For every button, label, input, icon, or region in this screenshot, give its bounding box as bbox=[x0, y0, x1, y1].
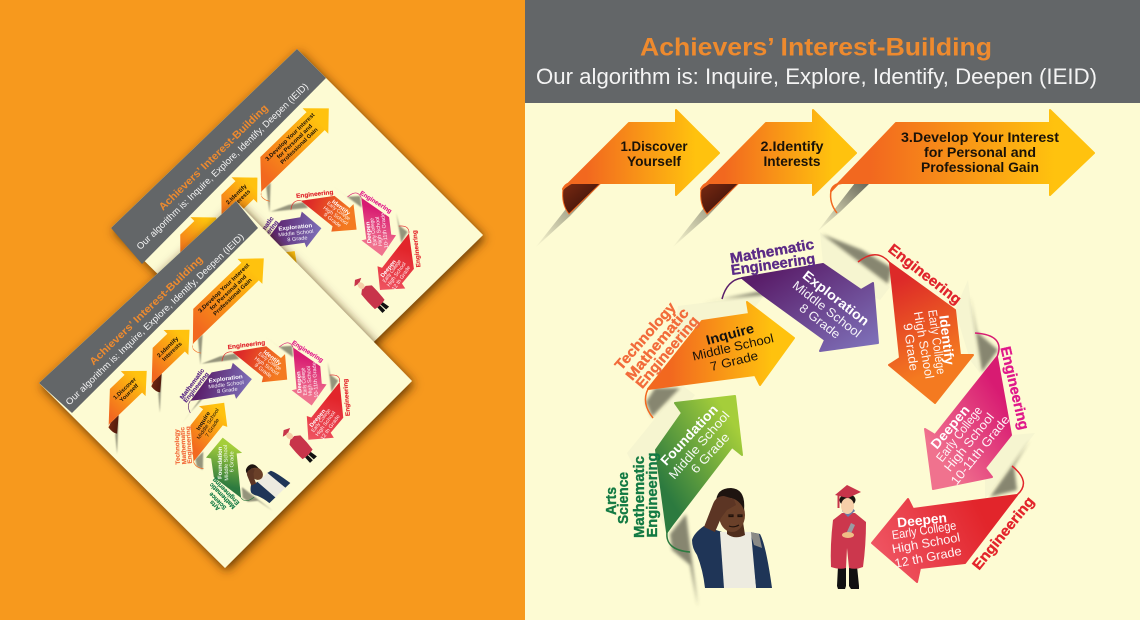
front card artwork: Deepen bbox=[309, 408, 328, 429]
front card artwork: Engineering bbox=[342, 378, 352, 416]
front card artwork: Mathematic bbox=[179, 426, 188, 465]
curl line bbox=[1012, 466, 1023, 495]
gown bbox=[831, 513, 866, 569]
jacket bbox=[692, 526, 772, 588]
front card artwork: 7 Grade bbox=[205, 418, 221, 438]
subject label: Engineering bbox=[885, 241, 964, 308]
collar bbox=[842, 508, 855, 517]
subject label: Engineering bbox=[970, 494, 1038, 573]
school level: Middle School bbox=[790, 278, 864, 340]
fold tail bbox=[817, 183, 870, 232]
front card artwork bbox=[54, 222, 397, 560]
front card artwork: Inquire bbox=[196, 411, 212, 432]
arrow label: 2.Identify bbox=[760, 139, 824, 154]
front card artwork: High School bbox=[315, 410, 337, 438]
back card artwork: Interests bbox=[231, 189, 252, 210]
front card paper bbox=[39, 201, 412, 568]
front card artwork: High School bbox=[306, 366, 314, 396]
curl line bbox=[667, 532, 690, 552]
school level: Middle School bbox=[691, 331, 775, 364]
subjects label: Engineering bbox=[730, 251, 816, 279]
raised arm and hand bbox=[704, 496, 736, 532]
icon: graduate in red gown bbox=[831, 485, 866, 589]
subjects label: Science bbox=[616, 472, 632, 524]
Deepen 10-11 step bbox=[925, 333, 1031, 489]
front thumbnail card bbox=[39, 201, 412, 568]
back card artwork: High School bbox=[386, 261, 408, 288]
face bbox=[719, 498, 745, 532]
red arrow bbox=[872, 495, 1017, 582]
curl line bbox=[645, 389, 653, 418]
grade: 10-11th Grade bbox=[948, 413, 1013, 488]
front card artwork: Exploration bbox=[208, 374, 244, 385]
eyes and mouth bbox=[729, 515, 742, 527]
back card artwork: 9 Grade bbox=[322, 212, 342, 229]
front card artwork: Deepen bbox=[296, 370, 304, 393]
step name: Inquire bbox=[704, 320, 756, 348]
back card artwork: 2.Identify bbox=[225, 183, 249, 206]
diploma bbox=[846, 523, 855, 536]
hair bbox=[840, 494, 856, 506]
grade: 12 th Grade bbox=[893, 544, 963, 571]
subject label: Engineering bbox=[997, 345, 1031, 431]
hands bbox=[842, 532, 854, 538]
front card artwork: High School bbox=[253, 356, 280, 377]
front card artwork: Early College bbox=[257, 351, 282, 372]
arrow label: 3.Develop Your Interest bbox=[901, 130, 1060, 145]
front card artwork: Foundation bbox=[218, 446, 224, 479]
back card artwork: Early College bbox=[325, 201, 351, 222]
front card artwork: Engineering bbox=[227, 339, 266, 351]
dark curl bbox=[563, 183, 601, 214]
front card artwork: Engineering bbox=[290, 339, 325, 364]
back card artwork: Our algorithm is: Inquire, Explore, Identify, Deepen (IEID) bbox=[135, 81, 310, 252]
front card artwork: Mathematic bbox=[179, 367, 207, 401]
front card artwork: Engineering bbox=[185, 426, 194, 464]
green arrow bbox=[656, 396, 742, 532]
step name: Identify bbox=[936, 314, 957, 366]
back card artwork: Deepen bbox=[365, 221, 373, 243]
front card artwork: Mathematic bbox=[208, 481, 237, 510]
arrow 2: Identify Interests bbox=[672, 110, 856, 248]
front card artwork: 12 th Grade bbox=[320, 414, 342, 441]
step name: Deepen bbox=[928, 402, 973, 452]
front card artwork: Engineering bbox=[211, 476, 241, 506]
legs bbox=[837, 566, 859, 589]
arrow label line 2: for Personal and bbox=[924, 145, 1036, 160]
grade: 8 Grade bbox=[797, 301, 843, 342]
back card artwork: Engineering bbox=[296, 189, 334, 200]
back card artwork: Early College bbox=[382, 259, 403, 284]
hood bbox=[750, 532, 762, 548]
header band bbox=[525, 0, 1140, 103]
front card artwork: 2.Identify bbox=[156, 336, 181, 359]
step name: Deepen bbox=[896, 510, 948, 530]
orange arrow bbox=[648, 302, 794, 389]
front card artwork: 10-11th Grade bbox=[311, 362, 320, 398]
front card artwork: Middle School bbox=[196, 408, 221, 441]
school type: Early College bbox=[933, 404, 985, 465]
tassel bbox=[838, 495, 840, 508]
curl line bbox=[975, 333, 999, 357]
curl line bbox=[722, 278, 742, 299]
back card artwork: Deepen bbox=[380, 259, 398, 279]
back card artwork: High School bbox=[322, 205, 349, 227]
back card artwork: Middle School bbox=[278, 229, 314, 238]
back card artwork: Engineering bbox=[411, 230, 422, 268]
arrow body bbox=[563, 110, 719, 195]
arrow 1: Discover Yourself bbox=[535, 110, 719, 248]
mortarboard bbox=[835, 485, 861, 498]
subjects label: Mathematic bbox=[729, 237, 815, 267]
front card artwork: Identify bbox=[262, 350, 283, 368]
arrow label line 3: Professional Gain bbox=[921, 160, 1039, 175]
school level: Middle School bbox=[666, 409, 732, 482]
front card artwork: Our algorithm is: Inquire, Explore, Identify, Deepen (IEID) bbox=[64, 232, 246, 407]
school type: Early College bbox=[925, 309, 948, 375]
back card artwork: 12 th Grade bbox=[391, 265, 412, 292]
school type: Early College bbox=[891, 518, 957, 542]
front card artwork: 8 Grade bbox=[217, 387, 238, 395]
icon: boy with hand on forehead bbox=[692, 488, 772, 588]
back card artwork: Identify bbox=[330, 199, 352, 217]
curl line bbox=[831, 191, 837, 213]
back card artwork: High School bbox=[375, 216, 384, 246]
front card artwork: Middle School bbox=[223, 445, 230, 481]
hair bbox=[716, 488, 744, 510]
arrow label: 1.Discover bbox=[620, 139, 688, 154]
back card artwork: 8 Grade bbox=[287, 235, 308, 243]
subjects label: Mathematic bbox=[632, 456, 648, 538]
back card artwork: Mathematic bbox=[249, 215, 276, 248]
pink arrow bbox=[925, 357, 1011, 489]
back card artwork: Engineering bbox=[358, 190, 393, 215]
front card artwork: 9 Grade bbox=[253, 363, 273, 379]
back card artwork bbox=[125, 72, 460, 401]
fold tail bbox=[535, 183, 601, 248]
back card artwork: for Personal and bbox=[276, 123, 314, 160]
back thumbnail card bbox=[111, 49, 483, 414]
grade: 9 Grade bbox=[900, 322, 921, 372]
back card artwork: Early College bbox=[369, 218, 379, 246]
front card artwork: Yourself bbox=[119, 383, 140, 404]
front card artwork: 6 Grade bbox=[229, 451, 235, 472]
grade: 7 Grade bbox=[709, 349, 760, 374]
subjects label bbox=[729, 237, 816, 279]
arrow label line 2: Yourself bbox=[627, 154, 682, 169]
fold tail bbox=[672, 183, 739, 248]
subjects label: Engineering bbox=[645, 452, 661, 538]
dark curl bbox=[701, 183, 739, 214]
subjects label bbox=[612, 300, 703, 392]
title: Achievers’ Interest-Building bbox=[640, 34, 992, 62]
main infographic panel bbox=[525, 0, 1140, 620]
front card artwork: Science bbox=[207, 490, 228, 511]
subjects label: Engineering bbox=[633, 313, 703, 392]
back card header band bbox=[111, 49, 326, 264]
arrow body bbox=[701, 110, 856, 195]
subjects label: Mathematic bbox=[623, 305, 693, 384]
step name: Exploration bbox=[800, 268, 872, 329]
purple arrow bbox=[742, 264, 878, 351]
front card artwork: Interests bbox=[162, 341, 184, 363]
neck bbox=[727, 522, 745, 537]
fold shadows behind the spiral bbox=[627, 232, 1035, 607]
Foundation step bbox=[604, 396, 742, 552]
subjects label bbox=[604, 452, 661, 538]
front card artwork: Arts bbox=[208, 498, 222, 512]
front card artwork: Engineering bbox=[182, 371, 211, 404]
subjects label: Arts bbox=[604, 487, 620, 515]
front card header band bbox=[39, 201, 258, 413]
school level: High School bbox=[942, 410, 997, 474]
arrow 3: Develop Your Interest bbox=[817, 110, 1094, 232]
Exploration step bbox=[722, 237, 878, 351]
arrow label line 2: Interests bbox=[764, 154, 820, 169]
front card artwork: 3.Develop Your Interest bbox=[198, 263, 251, 314]
subjects label: Technology bbox=[612, 300, 679, 374]
front card artwork: Middle School bbox=[208, 380, 244, 390]
school level: High School bbox=[911, 310, 936, 380]
front card artwork: Early College bbox=[311, 408, 332, 434]
arrow body bbox=[831, 110, 1094, 195]
back card artwork: 10-11th Grade bbox=[380, 213, 390, 249]
shirt bbox=[720, 532, 756, 588]
back card artwork: Exploration bbox=[278, 223, 313, 233]
Deepen 12 step bbox=[872, 466, 1038, 582]
back card artwork: Achievers’ Interest-Building bbox=[157, 102, 271, 213]
front card artwork: Early College bbox=[300, 367, 309, 396]
red-orange arrow bbox=[889, 263, 973, 403]
back card artwork: Professional Gain bbox=[280, 127, 320, 166]
back card artwork: Engineering bbox=[253, 219, 280, 252]
face bbox=[841, 498, 854, 514]
subtitle: Our algorithm is: Inquire, Explore, Identify, Deepen (IEID) bbox=[536, 64, 1097, 89]
school level: High School bbox=[891, 530, 961, 556]
step name: Foundation bbox=[657, 402, 721, 468]
back card paper bbox=[111, 49, 483, 414]
front card artwork: for Personal and bbox=[209, 274, 249, 312]
front card artwork: 1.Discover bbox=[113, 376, 138, 401]
panel background bbox=[525, 103, 1140, 620]
front card artwork: Achievers’ Interest-Building bbox=[87, 254, 205, 368]
Inquire step bbox=[612, 300, 794, 418]
front card artwork: Professional Gain bbox=[213, 277, 254, 317]
back card artwork: 3.Develop Your Interest bbox=[265, 112, 316, 163]
front card artwork: Technology bbox=[174, 428, 182, 465]
Identify step bbox=[858, 241, 973, 403]
curl line bbox=[858, 255, 890, 263]
grade: 6 Grade bbox=[688, 430, 732, 476]
